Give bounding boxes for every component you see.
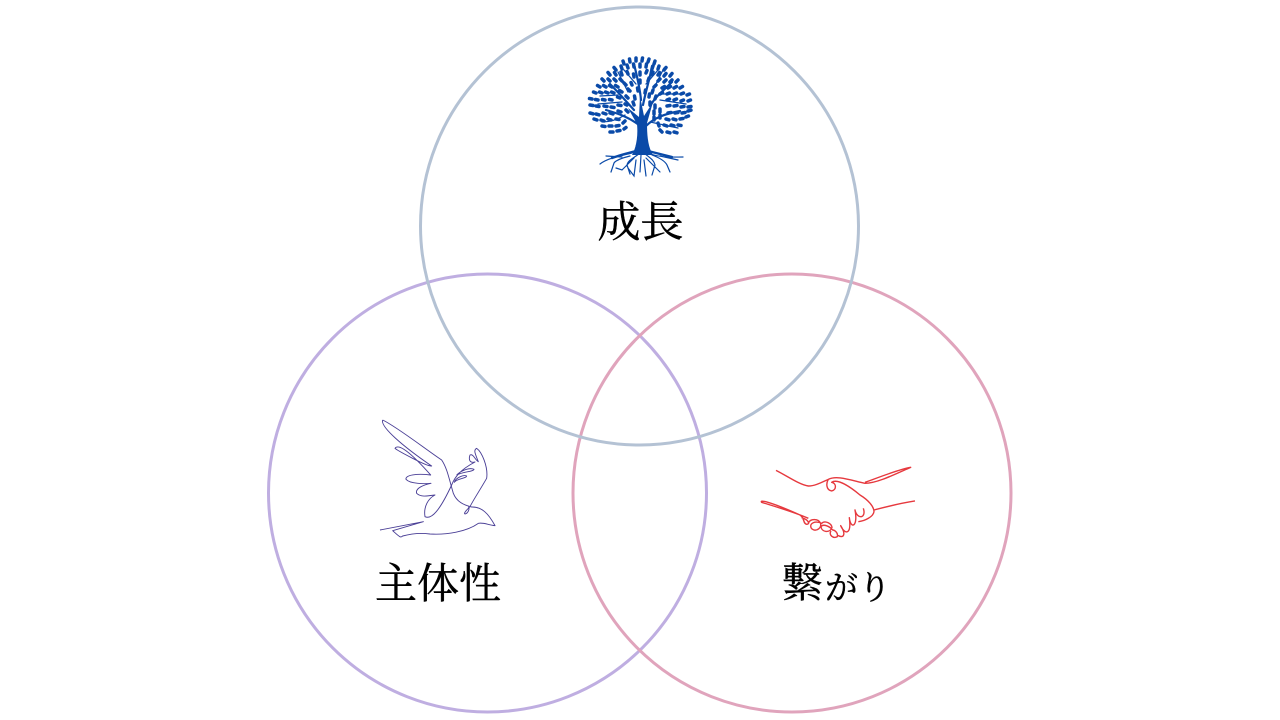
label kanji: 繋	[782, 560, 823, 606]
tree leaves	[590, 58, 691, 133]
icon: dove	[380, 420, 495, 537]
icon: tree	[590, 58, 691, 176]
dove body and wing line	[380, 420, 495, 537]
icon: handshake	[761, 467, 915, 537]
label: 繋がり	[782, 560, 891, 607]
tree trunk	[628, 96, 653, 155]
handshake lower arms	[761, 501, 915, 524]
tree branches	[598, 64, 686, 128]
handshake upper arms	[776, 467, 911, 522]
circle: 成長	[420, 7, 858, 445]
circle: 主体性	[268, 274, 706, 712]
label: 主体性: 主体性	[375, 562, 501, 608]
label: 成長: 成長	[598, 200, 684, 247]
label kana: がり	[825, 571, 891, 607]
handshake fingers	[808, 508, 864, 537]
dove feather loops	[382, 420, 487, 517]
tree roots	[600, 151, 683, 176]
circle: 繋がり	[573, 274, 1011, 712]
